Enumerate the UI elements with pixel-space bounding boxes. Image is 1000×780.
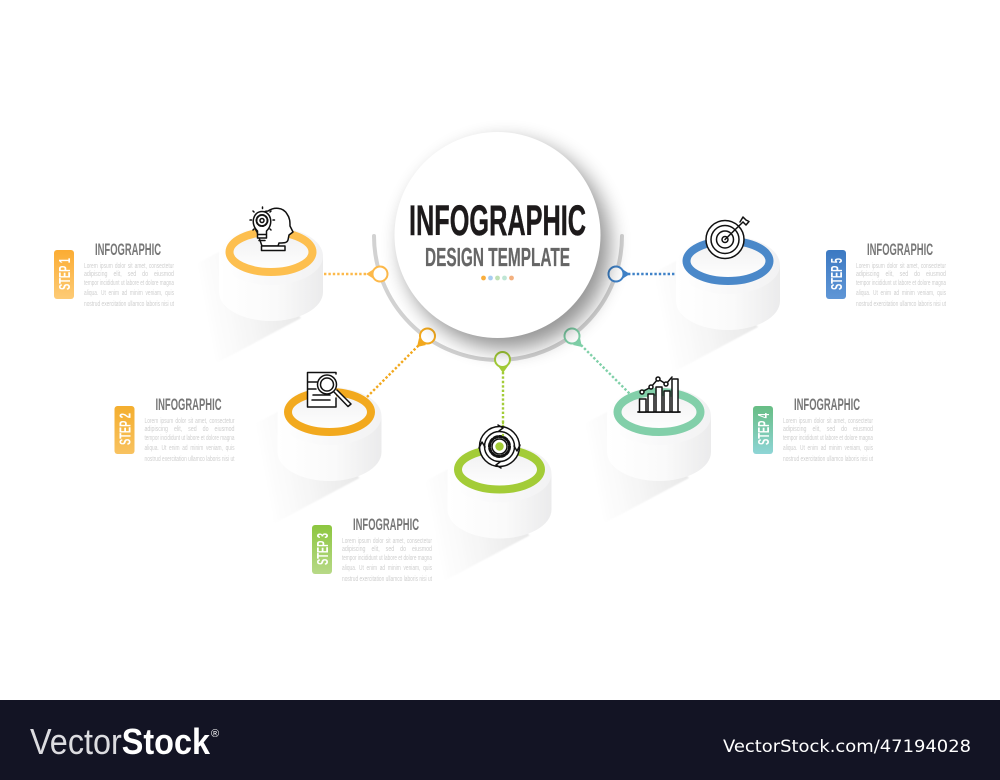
step 5 body text: nostrud exercitation ullamco laboris nisi ut xyxy=(856,301,946,308)
step 4 badge: STEP 4 xyxy=(756,413,773,445)
step 3 badge: STEP 3 xyxy=(315,533,332,565)
central circle shadow xyxy=(402,141,610,349)
connector: step 5 xyxy=(608,266,676,282)
step 5 body text xyxy=(856,263,946,308)
icon: bar chart xyxy=(638,377,680,412)
step 3 body text: tempor incididunt ut labore et dolore magna xyxy=(342,555,432,562)
step 2 block xyxy=(114,395,235,463)
icon: gear with circular arrows xyxy=(479,422,520,468)
cylinder 5 with ring xyxy=(606,236,780,375)
step 3 heading: INFOGRAPHIC xyxy=(353,515,419,534)
step 2 badge: STEP 2 xyxy=(118,413,134,445)
step 2 heading: INFOGRAPHIC xyxy=(156,395,222,414)
step 5 body text: adipiscing elit, sed do eiusmod xyxy=(856,271,946,278)
step 4 block xyxy=(753,395,873,463)
step 4 body text: tempor incididunt ut labore et dolore magna xyxy=(783,435,873,442)
step 3 block xyxy=(312,515,432,583)
step 2 body text: tempor incididunt ut labore et dolore magna xyxy=(144,435,235,442)
connector: step 1 xyxy=(324,266,388,282)
step 5 body text: aliqua. Ut enim ad minim veniam, quis xyxy=(856,290,946,297)
footer logo: VectorStock xyxy=(30,721,211,762)
step 5 body text: tempor incididunt ut labore et dolore magna xyxy=(856,280,946,287)
step 1 body text: Lorem ipsum dolor sit amet, consectetur xyxy=(84,263,174,270)
step 1 badge: STEP 1 xyxy=(57,258,74,290)
step 1 body text: aliqua. Ut enim ad minim veniam, quis xyxy=(84,290,174,297)
step 5 badge: STEP 5 xyxy=(829,258,846,290)
step 3 body text: adipiscing elit, sed do eiusmod xyxy=(342,546,432,553)
step 1 body text: nostrud exercitation ullamco laboris nisi ut xyxy=(84,301,174,308)
cylinder 4 with ring xyxy=(537,387,711,526)
icon: target with arrow xyxy=(706,217,749,258)
colour dots xyxy=(481,276,514,280)
cylinder 2 with ring xyxy=(208,387,382,526)
step 5 body text: Lorem ipsum dolor sit amet, consectetur xyxy=(856,263,946,270)
step 1 body text: tempor incididunt ut labore et dolore magna xyxy=(84,280,174,287)
step 2 body text: Lorem ipsum dolor sit amet, consectetur xyxy=(144,418,235,425)
connector: step 2 xyxy=(367,328,435,397)
icon: document with magnifier xyxy=(308,372,351,407)
step 4 body text: aliqua. Ut enim ad minim veniam, quis xyxy=(783,445,873,452)
step 2 body text: adipiscing elit, sed do eiusmod xyxy=(144,426,235,433)
step 5 heading: INFOGRAPHIC xyxy=(867,240,933,259)
step 1 body text: adipiscing elit, sed do eiusmod xyxy=(84,271,174,278)
registered mark: ® xyxy=(211,728,219,740)
step 2 body text: aliqua. Ut enim ad minim veniam, quis xyxy=(144,445,235,452)
connector: step 4 xyxy=(564,328,630,394)
step 4 body text xyxy=(783,418,873,463)
step 4 body text: Lorem ipsum dolor sit amet, consectetur xyxy=(783,418,873,425)
step 4 heading: INFOGRAPHIC xyxy=(794,395,860,414)
step 2 body text xyxy=(144,418,235,463)
central circle xyxy=(394,132,600,338)
icon: head with light bulb xyxy=(250,207,293,250)
step 1 body text xyxy=(84,263,174,308)
step 2 body text: nostrud exercitation ullamco laboris nisi ut xyxy=(144,456,235,463)
step 1 block xyxy=(54,240,174,308)
step 3 body text: aliqua. Ut enim ad minim veniam, quis xyxy=(342,565,432,572)
step 4 body text: adipiscing elit, sed do eiusmod xyxy=(783,426,873,433)
central arc xyxy=(374,236,622,360)
footer url: VectorStock.com/47194028 xyxy=(723,737,971,757)
footer bar xyxy=(0,700,1000,780)
step 3 body text: nostrud exercitation ullamco laboris nisi ut xyxy=(342,576,432,583)
cylinder 3 with ring xyxy=(378,444,552,584)
cylinder 1 with ring xyxy=(149,227,323,366)
connector: step 3 xyxy=(495,352,510,438)
step 5 block xyxy=(826,240,946,308)
subtitle: DESIGN TEMPLATE xyxy=(425,242,570,272)
step 4 body text: nostrud exercitation ullamco laboris nisi ut xyxy=(783,456,873,463)
step 3 body text: Lorem ipsum dolor sit amet, consectetur xyxy=(342,538,432,545)
title: INFOGRAPHIC xyxy=(409,197,586,245)
step 1 heading: INFOGRAPHIC xyxy=(95,240,161,259)
step 3 body text xyxy=(342,538,432,583)
